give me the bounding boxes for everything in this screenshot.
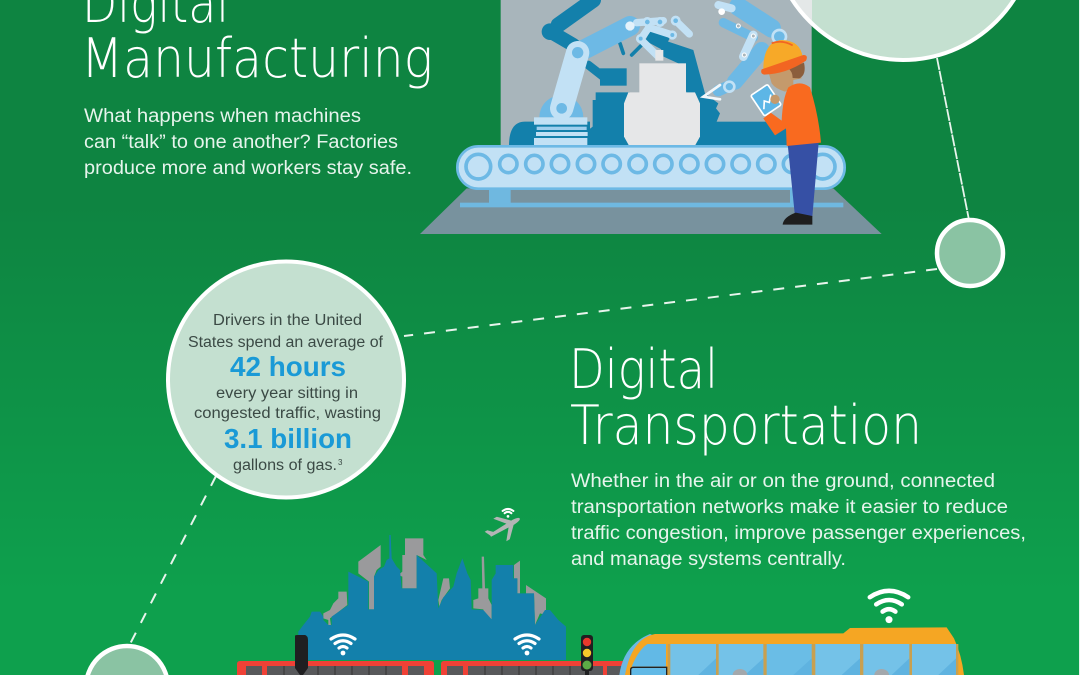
medium blue arm — [580, 26, 630, 52]
stat text: 3 — [338, 458, 343, 467]
bus cab window — [632, 644, 666, 667]
node circle: bottom left — [86, 646, 168, 675]
worker hair — [788, 63, 805, 78]
heading: Digital Manufacturing — [81, 0, 433, 90]
text block: manufacturing description: What happens when machines — [84, 106, 361, 127]
factory back wall — [501, 0, 812, 147]
helmet ridge — [772, 42, 793, 45]
stat text — [188, 312, 384, 474]
arm joints — [556, 47, 583, 114]
grey background buildings — [323, 538, 546, 626]
heading: Digital Transportation: Digital — [569, 338, 718, 401]
stat text: gallons of gas. — [233, 457, 337, 474]
stat circle: congestion — [168, 262, 404, 498]
text block: manufacturing description: can “talk” to one another? Factories — [84, 132, 398, 153]
factory floor — [420, 188, 882, 234]
text block: transportation description: Whether in the air or on the ground, connected — [571, 471, 995, 492]
bus door outline — [631, 667, 667, 675]
worker shoe — [783, 213, 812, 225]
light blue arm — [562, 53, 578, 108]
black signal post — [295, 635, 308, 675]
connector: dashed line from node to stat circle — [404, 269, 937, 336]
bus front edge — [619, 634, 660, 675]
stat text: 42 hours — [230, 351, 346, 382]
conveyor rollers — [466, 154, 835, 179]
gripper dark head — [645, 28, 670, 50]
stat text: congested traffic, wasting — [194, 405, 381, 422]
connector: dotted line from top circle to node — [937, 58, 969, 220]
text block: transportation description: and manage systems centrally. — [571, 549, 846, 570]
bus — [619, 627, 964, 675]
top stat circle (cropped) — [790, 0, 1016, 62]
spring stack — [534, 117, 588, 146]
bus windows — [668, 644, 958, 675]
connector: dashed line from stat circle to bottom node — [128, 476, 216, 648]
bus roof and body — [625, 627, 964, 675]
icon: wifi on train 1 — [331, 635, 355, 655]
conveyor legs and rail — [460, 188, 843, 207]
conveyor belt — [457, 146, 845, 189]
hand — [770, 95, 780, 104]
train car 2 — [441, 661, 631, 675]
icon: airplane — [481, 507, 526, 548]
worker torso — [763, 83, 821, 146]
illustration: city skyline — [298, 535, 566, 660]
dark robot arm — [553, 0, 642, 77]
heading: Digital Transportation — [569, 338, 922, 457]
heading: Digital Transportation: Transportation — [570, 394, 922, 457]
worker helmet — [763, 40, 803, 69]
passenger heads — [733, 669, 889, 675]
right robot arm — [703, 5, 786, 99]
train car 1 — [237, 661, 434, 675]
stat text: every year sitting in — [216, 385, 358, 402]
worker legs — [788, 143, 819, 217]
worker — [751, 40, 821, 225]
heading: Digital Manufacturing: Manufacturing — [81, 27, 433, 90]
blue foreground skyline — [298, 535, 566, 660]
text block: transportation description: traffic congestion, improve passenger experiences, — [571, 523, 1026, 544]
icon: wifi on train 2 — [515, 635, 539, 655]
text block: transportation description: transportation networks make it easier to reduce — [571, 497, 1008, 518]
node circle: top right — [937, 220, 1003, 286]
tablet — [751, 84, 781, 116]
icon: wifi on bus — [870, 591, 908, 623]
window reflections — [698, 658, 956, 675]
text block: manufacturing description — [84, 106, 412, 179]
text block: transportation description — [571, 471, 1026, 570]
worker head — [768, 65, 802, 92]
stat text: States spend an average of — [188, 334, 384, 351]
stat text: 3.1 billion — [224, 423, 352, 454]
traffic light — [581, 635, 593, 675]
text block: manufacturing description: produce more and workers stay safe. — [84, 158, 412, 179]
arm base — [539, 95, 583, 117]
stat text: Drivers in the United — [213, 312, 362, 329]
workpiece — [624, 50, 700, 146]
gripper fingers — [625, 17, 689, 57]
helmet brim — [761, 55, 807, 75]
illustration: robotic factory line — [420, 0, 882, 234]
icon: wifi above plane — [503, 509, 513, 518]
dark machinery — [509, 23, 792, 146]
